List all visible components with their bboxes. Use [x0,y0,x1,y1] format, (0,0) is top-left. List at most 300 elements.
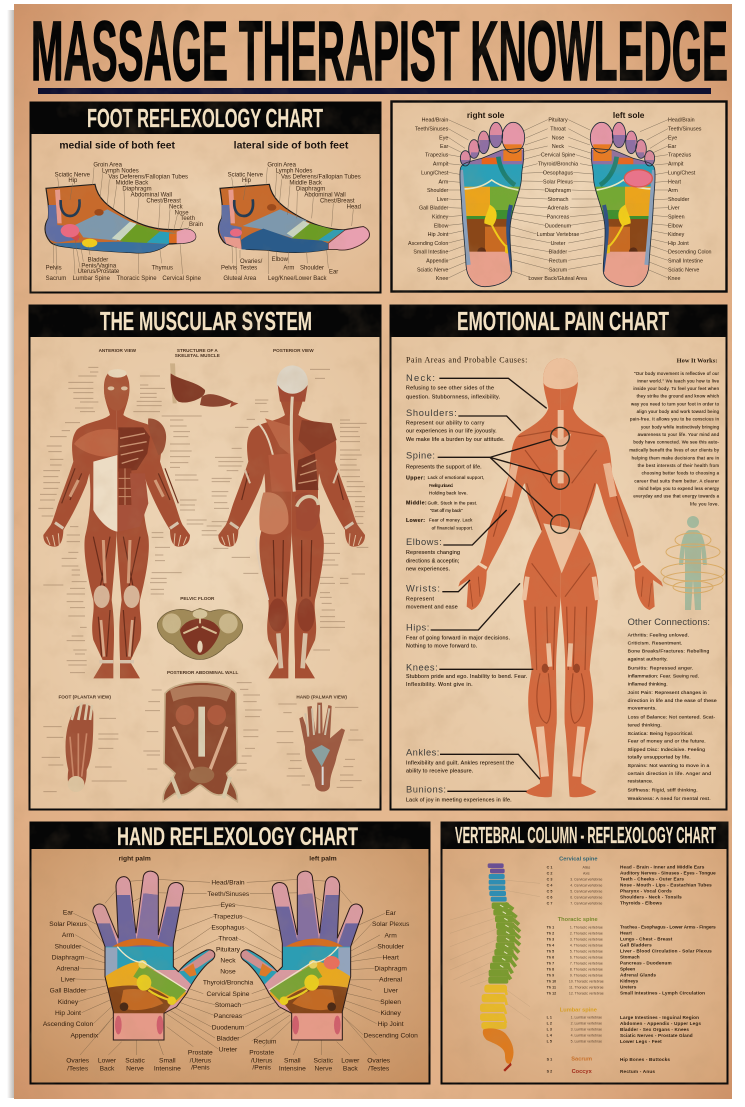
cervical group: 4. Cervical vertebrae [570,883,602,887]
lateral foot heading: lateral side of both feet [234,141,349,152]
hand labels left: Ear [63,910,74,917]
center sole labels: Cervical Spine [541,153,575,159]
foot labels: Chest/Breast [146,198,181,204]
hand labels center: Cervical Spine [207,991,250,998]
right sole labels: Sciatic Nerve [417,267,448,273]
connections list: against authority. [628,657,668,663]
right sole labels [408,118,449,282]
thoracic group: 6. Thoracic vertebrae [570,955,603,959]
how it works paragraph: your body while instinctively bringing [641,424,720,429]
causes text: Neck: [406,373,435,383]
lower causes text: Inflexibility. Wont give in. [406,682,473,688]
body pain markers [551,427,569,533]
figure: skeletal muscle structure [170,363,238,407]
foot labels: Bladder [88,257,108,263]
figure: plantar foot [66,703,93,792]
right sole labels: Ascending Colon [408,241,448,247]
medial foot heading: medial side of both feet [59,141,176,152]
hand labels right: Spleen [380,999,401,1006]
hand labels bottom: Prostate [249,1050,274,1057]
lumbar group: 2. Lumbar vertebrae [571,1022,602,1026]
figure: pelvic floor [157,608,243,659]
thoracic group: 9. Thoracic vertebrae [570,973,603,977]
left column upper: causes [406,356,553,573]
cervical group: Shoulders - Neck - Tonsils [620,895,682,900]
causes text: our experiences in our life joyously. [406,429,497,435]
lower causes text: Stubborn pride and ego. Inability to bend. Fear. [406,674,527,680]
lumbar group: L 1 [547,1016,552,1020]
hand labels center: Throat [218,935,238,942]
foot labels: Head [347,204,361,210]
left sole labels: Trapezius [668,153,692,159]
figure: anterior view [43,369,190,678]
foot labels: Groin Area [93,162,123,168]
foot labels: Gluteal Area [223,276,257,282]
left sole labels: Armpit [668,162,684,168]
lumbar group: Large Intestines - Inguinal Region [620,1015,699,1020]
connections list: Bone Breaks/Fractures: Rebelling [628,649,710,655]
lower causes text: Ankles: [406,748,439,758]
connections list: Criticism. Resentment. [628,640,682,646]
right sole labels: Knee [436,276,448,282]
heading: hand reflexology: HAND REFLEXOLOGY CHART [117,823,358,851]
lower causes text: Bunions: [406,785,446,795]
foot labels [46,162,361,282]
hand labels center: Teeth/Sinuses [207,891,250,898]
hand labels center: Pituitary [216,946,241,953]
left sole labels: Descending Colon [668,250,712,256]
hand labels bottom: Prostate [188,1050,213,1057]
icon: right palm [90,871,220,1043]
connections list: Weakness: A need for mental rest. [628,796,711,802]
connections list: Stiffness: Rigid, stiff thinking. [628,788,698,794]
icon: spine column [480,863,520,1072]
center sole labels: Solar Plexus [543,179,573,185]
lower causes text: Nothing to move forward to. [406,644,477,650]
cervical group: C 4 [547,883,553,887]
other connections text [628,617,717,802]
foot labels: Chest/Breast [320,198,355,204]
hand labels center: Eyes [221,902,236,909]
foot labels: Middle Back [289,180,322,186]
sacrum and coccyx group: S 1 [547,1058,552,1062]
view captions: POSTERIOR VIEW [273,348,314,353]
hand labels bottom: /Uterus [251,1057,273,1064]
right sole labels: Arm [439,179,449,185]
lower captions: FOOT (PLANTAR VIEW) [58,694,111,699]
foot labels: Thoracic Spine [117,276,157,282]
hand labels center: Stomach [215,1002,241,1009]
cervical group: Auditory Nerves - Sinuses - Eyes - Tongue [620,871,716,876]
foot labels: Brain [189,222,203,228]
hand labels bottom: Sciatic [125,1058,145,1065]
cervical group: C 1 [547,865,552,869]
center sole labels: Sacrum [549,267,568,273]
hand labels bottom: /Uterus [190,1057,212,1064]
anatomy label dashes [38,367,368,673]
palm headings: left palm [309,856,337,863]
sacrum and coccyx group [547,1057,670,1075]
foot labels: Arm [283,265,294,271]
thoracic group: Th 1 [547,925,554,929]
causes text: Represents changing [406,550,460,556]
right sole labels: Appendix [426,258,449,264]
right sole labels: Ear [440,144,449,150]
connections list: totally unsupported by life. [628,755,691,761]
foot labels: Hip [242,178,252,184]
right sole labels: Shoulder [427,188,449,194]
lumbar group: 3. Lumbar vertebrae [571,1028,602,1032]
connections list: resistance. [628,779,653,785]
thoracic group: Thoracic spine [558,917,598,923]
heading: foot reflexology: FOOT REFLEXOLOGY CHART [87,103,323,133]
cervical group: C 5 [547,889,552,893]
left sole labels: Knee [668,276,680,282]
how it works paragraph: body have connected. We see this auto- [633,440,720,445]
foot labels: Sciatic Nerve [228,172,264,178]
foot labels: Testes [240,265,257,271]
thoracic group: 11. Thoracic vertebrae [569,985,604,989]
hand labels bottom: Back [100,1065,115,1072]
center sole labels: Diaphragm [545,188,572,194]
foot labels: Leg/Knee/Lower Back [268,276,327,282]
cervical group: Head - Brain - Inner and Middle Ears [620,865,705,870]
lumbar group: L 5 [547,1040,552,1044]
hand labels center: Bladder [217,1035,240,1042]
cervical group: 7. Cervical vertebrae [570,901,602,905]
foot labels: Penis/Vagina [81,263,117,269]
left sole labels: Kidney [668,232,685,238]
thoracic group: Trachea - Esophagus - Lower Arms - Fingers [620,925,716,930]
foot labels: Lumbar Spine [73,276,111,282]
panel: sole reflexology [392,102,726,292]
foot labels: Ovaries/ [240,259,263,265]
thoracic group: Spleen [620,967,635,972]
sacrum and coccyx group: S 2 [547,1070,552,1074]
icon: left palm [236,871,366,1043]
sacrum and coccyx group: Coccyx [572,1069,593,1075]
paper shadow [7,10,15,1098]
hand labels right: Kidney [380,1010,402,1017]
causes text: of financial support. [432,526,473,531]
left sole labels: Teeth/Sinuses [668,127,702,133]
view captions: SKELETAL MUSCLE [175,353,220,358]
hand labels right: Arm [385,932,397,939]
lumbar group: L 3 [547,1028,552,1032]
faint rib lines [450,880,540,1020]
how it works paragraph: inside your body. To feel your feet when [633,386,720,391]
causes text: Fear of money. Lack [429,518,473,523]
thoracic group: Th 12 [547,991,556,995]
how it works paragraph: career that suits them better. A clearer [634,478,720,483]
hand labels center [203,880,253,1053]
center sole labels: Lumbar Vertebrae [537,232,579,238]
lumbar group: L 2 [547,1022,552,1026]
view captions: POSTERIOR ABDOMINAL WALL [167,670,239,675]
connections list: Slipped Disc: Indecisive. Feeling [628,747,705,753]
foot labels: Neck [169,204,183,210]
thoracic group: 10. Thoracic vertebrae [569,979,604,983]
left sole labels: Arm [668,188,678,194]
foot labels: Lymph Nodes [102,168,139,174]
hand labels bottom: /Penis [191,1065,210,1072]
hand labels left: Kidney [58,999,79,1006]
hand labels bottom: /Penis [252,1065,272,1072]
connections list: Arthritis: Feeling unloved. [628,633,689,639]
thoracic group: Th 8 [547,967,554,971]
thoracic group: Ureters [620,985,637,990]
thoracic group: Th 3 [547,937,554,941]
thoracic group: Pancreas - Duodenum [620,961,672,966]
hand labels center: Esophagus [211,924,245,931]
foot labels: Vas Deferens/Fallopian Tubes [281,174,361,180]
lumbar group: L 4 [547,1034,553,1038]
cervical group: Thyroids - Elbows [620,901,662,906]
center sole labels: Lower Back/Gluteal Area [528,276,587,282]
hand leader lines [73,879,385,1055]
left sole heading: left sole [613,110,645,120]
foot labels: Vas Deferens/Fallopian Tubes [108,174,188,180]
cervical group: Pharynx - Vocal Cords [620,889,672,894]
view captions [99,348,314,675]
hand labels right: Descending Colon [363,1032,418,1039]
right sole labels: Trapezius [425,153,449,159]
sacrum and coccyx group: Sacrum [571,1057,592,1063]
right sole labels: Armpit [433,162,449,168]
hand labels center: Duodenum [212,1024,245,1031]
view captions: ANTERIOR VIEW [99,348,137,353]
hand labels bottom: Intensine [154,1065,181,1072]
thoracic group: Liver - Blood Circulation - Solar Plexus [620,949,712,954]
hand labels bottom: Ovaries [367,1058,391,1065]
right sole labels: Teeth/Sinuses [415,127,449,133]
thoracic group: 2. Thoracic vertebrae [570,931,603,935]
hand labels bottom: Nerve [314,1065,333,1072]
heading: muscular system: THE MUSCULAR SYSTEM [100,306,312,336]
hand labels right: Diaphragm [374,966,407,973]
lumbar group: 5. Lumbar vertebrae [571,1040,602,1044]
causes text [406,373,505,573]
foot labels: Pelvis [221,265,237,271]
how it works paragraph: "Our body movement is reflective of our [634,371,720,376]
icon: lateral foot [218,184,369,252]
lower causes text: Hips: [406,623,429,633]
icon: right sole [455,118,528,288]
sacrum and coccyx group: Hip Bones - Buttocks [620,1057,670,1062]
figure: posterior abdominal wall [163,682,237,802]
how it works paragraph: choosing better foods to choosing a [642,471,720,476]
center sole labels: Nose [552,135,564,141]
hand labels bottom: Small [159,1058,176,1065]
thoracic group: Stomach [620,955,640,960]
lumbar group: 1. Lumbar vertebrae [571,1016,602,1020]
view captions: PELVIC FLOOR [180,596,215,601]
section heading: Pain Areas and Probable Causes: [406,356,527,365]
thoracic group: Adrenal Glands [620,973,656,978]
causes text: Shoulders: [406,408,457,418]
left column lower: causes [406,580,540,803]
foot labels: Pelvis [46,265,62,271]
how it works text [629,358,720,507]
foot labels: Abdominal Wall [131,192,172,198]
causes text: We make life a burden by our attitude. [406,437,505,443]
right sole labels: Small Intestine [413,250,448,256]
lumbar group: Lower Legs - Feet [620,1039,662,1044]
connections list: tered thinking. [628,722,662,728]
connections list: Sprains: Not wanting to move in a [628,763,710,769]
center sole labels: Throat [550,127,566,133]
left sole labels: Lung/Chest [668,170,696,176]
lumbar group: Lumbar spine [560,1007,597,1013]
center sole labels: Neck [552,144,564,150]
thoracic group: 7. Thoracic vertebrae [570,961,603,965]
palm headings [119,856,337,863]
panel: foot reflexology chart [30,102,381,292]
medial and lateral foot diagrams [45,141,369,282]
cervical group: 6. Cervical vertebrae [570,895,602,899]
lower causes text: Lack of joy in meeting experiences in life. [406,797,512,803]
hand labels left: Shoulder [55,943,82,950]
lumbar group: Abdomen - Appendix - Upper Legs [620,1021,701,1026]
causes text: Represents the support of life. [406,465,482,471]
pointer lines [438,378,553,545]
hand labels left: Ascending Colon [43,1021,93,1028]
foot labels: Sacrum [46,276,66,282]
left sole labels: Spleen [668,215,685,221]
causes text: "Get off my back" [430,508,463,513]
foot labels: Nose [175,210,189,216]
cervical group: Cervical spine [559,856,598,862]
hand labels center: Pancreas [214,1013,243,1020]
how it works text: How It Works: [677,358,717,365]
hand labels right: Heart [383,954,399,961]
lumbar group [547,1007,701,1044]
center sole labels: Pancreas [547,215,570,221]
cervical group: C 3 [547,877,552,881]
foot labels: Abdominal Wall [304,192,346,198]
foot labels: Elbow [272,257,289,263]
heart zone [324,956,340,969]
thoracic group [547,917,716,996]
causes text: Spine: [406,450,435,460]
right sole labels: Lung/Chest [421,170,449,176]
thoracic group: Small Intestines - Lymph Circulation [620,991,705,996]
hand labels bottom: Back [343,1065,358,1072]
causes text: directions & acceptin; [406,558,459,564]
thoracic group: Th 10 [547,979,556,983]
center sole labels: Duodenum [545,223,572,229]
thoracic group: Th 5 [547,949,554,953]
small aura figure [661,516,725,610]
causes text: Holding back love. [429,491,468,496]
foot labels: Thymus [152,265,173,271]
hand labels right [363,910,418,1039]
lower causes text: Wrists: [406,584,440,594]
figure: palmar hand [299,703,345,792]
connections list: Inflammation: Fear. Seeing red. [628,673,699,679]
thoracic group: 4. Thoracic vertebrae [570,943,603,947]
center sole labels: Stomach [547,197,569,203]
left sole labels: Sciatic Nerve [668,267,699,273]
center sole labels: Rectum [549,258,568,264]
hand labels left [43,910,99,1039]
hand labels left: Hip Joint [55,1010,81,1017]
right sole labels: Eye [439,135,448,141]
lumbar group: 4. Lumbar vertebrae [571,1034,602,1038]
view captions: STRUCTURE OF A [177,348,218,353]
title rule [38,88,711,94]
sacrum and coccyx group: Rectum - Anus [620,1069,655,1074]
how it works paragraph: everyday and use that energy towards a [633,494,720,499]
lower causes text: Represent [406,597,435,603]
hand labels bottom: Small [284,1058,301,1065]
cervical group: Teeth - Cheeks - Outer Ears [620,877,684,882]
hand labels right: Liver [383,988,399,995]
lower causes text: Knees: [406,663,438,673]
right sole heading: right sole [467,110,505,120]
figure: posterior view [218,365,365,678]
left sole labels: Ear [668,144,677,150]
hand labels right: Solar Plexus [372,921,410,928]
connections list: Inflamed thinking. [628,681,668,687]
left sole labels: Hip Joint [668,241,689,247]
panel: the muscular system [29,305,381,810]
causes text: Represent our ability to carry [406,421,485,427]
cervical group: Axis [583,871,590,875]
foot labels: Ear [329,270,338,276]
foot labels: Sciatic Nerve [55,172,91,178]
lower causes text: movement and ease [406,605,458,611]
how it works paragraph: they strike the ground and know which [637,394,720,399]
thoracic group: Th 9 [547,973,554,977]
connections list: certain direction in life. Anger and [628,771,711,777]
hand labels center: Neck [220,958,236,965]
thoracic group: Th 7 [547,961,554,965]
cervical group: C 7 [547,901,552,905]
thoracic group: 5. Thoracic vertebrae [570,949,603,953]
hand labels left: Gall Bladder [50,988,87,995]
hand labels right: Hip Joint [378,1021,404,1028]
hand labels left: Solar Plexus [49,921,87,928]
connections list: Bursitis: Repressed anger. [628,665,693,671]
icon: left sole [587,118,660,288]
connections list: Fear of money and or the future. [628,738,706,744]
panel: hand reflexology chart [30,822,430,1084]
connections list: Joint Pain: Represent changes in [628,690,707,696]
left sole labels: Head/Brain [668,118,695,124]
cervical group: C 6 [547,895,552,899]
connections list [628,633,717,802]
center sole labels: Adrenals [547,206,569,212]
center sole labels: Oesophagus [543,170,573,176]
lower causes text: Fear of going forward in major decisions. [406,635,510,641]
cervical group [547,856,716,906]
lower captions [58,694,347,699]
thoracic group: Gall Bladders [620,943,652,948]
hand labels right: Ear [385,910,397,917]
hand labels right: Shoulder [377,943,405,950]
causes text: Lower: [406,518,425,524]
foot labels: Cervical Spine [162,276,202,282]
left sole labels: Shoulder [668,197,690,203]
how it works paragraph [629,371,720,507]
cervical group: C 2 [547,871,552,875]
hand labels left: Diaphragm [52,954,85,961]
center sole labels [528,118,587,282]
hand labels center: Head/Brain [211,880,245,887]
connections list: direction in life and the ease of these [628,698,717,704]
thoracic group: Lungs - Chest - Breast [620,937,673,942]
